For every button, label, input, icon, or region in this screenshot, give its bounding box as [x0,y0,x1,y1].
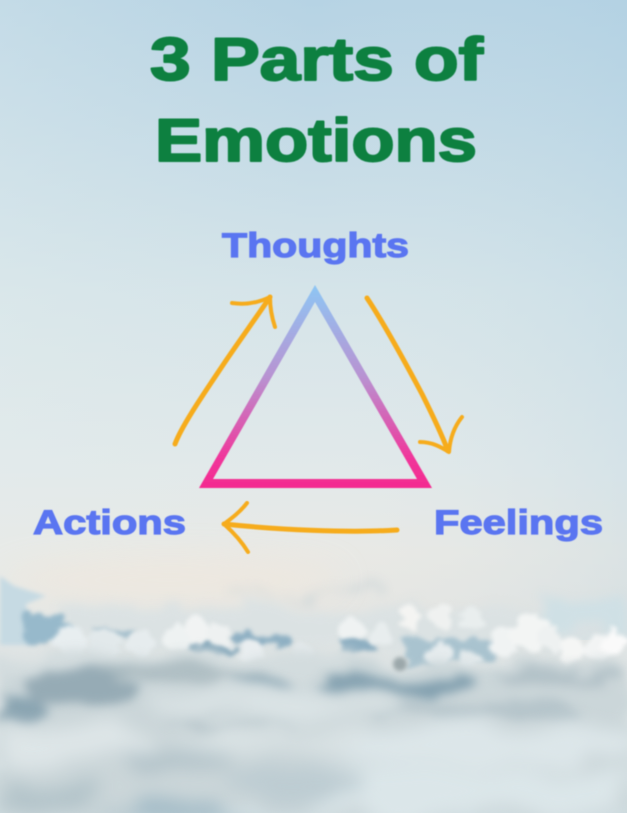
arrow: thoughts to feelings [367,298,462,452]
title: Emotions [155,107,477,174]
gradient triangle [199,285,432,488]
cloud layer [0,576,627,813]
triangle diagram [33,227,603,552]
blue cloud shadows [24,612,498,664]
arrow: feelings to actions [224,503,397,552]
title [150,26,484,174]
soft pale billows [0,691,627,813]
dark cloud shadows [0,668,627,727]
left cloud tower [0,576,46,645]
label: Thoughts: Thoughts [222,227,409,265]
grey cloud base [0,654,627,813]
arrow: actions to thoughts [175,297,275,444]
label: Feelings: Feelings [434,504,603,542]
spot under cloud [393,657,407,671]
title: 3 Parts of [150,26,484,93]
far haze band [60,593,627,646]
label: Actions: Actions [33,504,186,542]
bright billowing cloud tops [53,602,627,669]
